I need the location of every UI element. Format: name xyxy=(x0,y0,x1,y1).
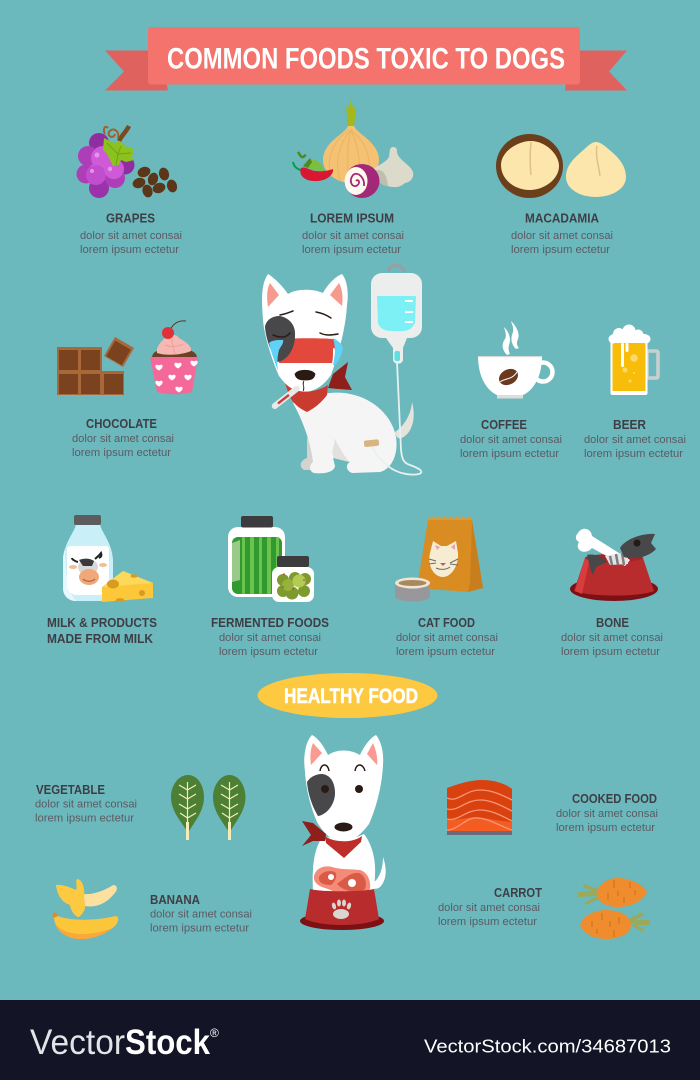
ears inner xyxy=(267,283,343,307)
text: banana description xyxy=(150,908,252,934)
text: bone description xyxy=(561,632,663,658)
text: banana description: lorem ipsum ectetur xyxy=(150,922,249,934)
closed eyes and brows xyxy=(273,311,338,337)
text: cat food description: dolor sit amet consai xyxy=(396,632,498,644)
panel: carrot xyxy=(438,878,650,939)
text: grapes description xyxy=(80,230,182,256)
bandana knot xyxy=(328,362,352,390)
tears xyxy=(269,338,343,371)
text: vegetable description: lorem ipsum ectetur xyxy=(35,812,134,824)
title banner xyxy=(105,27,627,90)
smiling brows xyxy=(320,765,365,771)
text: coffee description xyxy=(460,434,562,460)
panel: grapes xyxy=(76,126,182,256)
dog head xyxy=(262,274,348,392)
illustration: happy dog with steak bowl xyxy=(300,735,386,930)
ears inner xyxy=(310,743,377,765)
heading: milk and products: MADE FROM MILK xyxy=(47,631,154,646)
panel: beer xyxy=(584,324,686,460)
icon: spinach leaves xyxy=(171,775,246,840)
icon: chocolate and cupcake xyxy=(57,321,198,395)
text: beer description: lorem ipsum ectetur xyxy=(584,448,683,460)
text: fermented foods description: dolor sit amet consai xyxy=(219,632,321,644)
tail xyxy=(395,402,414,438)
panel: cooked food xyxy=(447,780,658,835)
eye patch xyxy=(307,774,335,816)
panel: banana xyxy=(52,879,252,939)
dog body xyxy=(313,834,375,895)
icon: bones in a red bowl xyxy=(570,529,658,601)
heading: bone: BONE xyxy=(596,615,629,630)
icon: salmon fillet xyxy=(447,780,512,835)
text: macadamia description: lorem ipsum ectetur xyxy=(511,244,610,256)
heading: coffee: COFFEE xyxy=(481,417,527,432)
icon: coffee cup xyxy=(478,321,552,398)
panel: macadamia xyxy=(496,134,626,256)
text: grapes description: lorem ipsum ectetur xyxy=(80,244,179,256)
heading: lorem ipsum: LOREM IPSUM xyxy=(310,210,394,226)
text: cat food description xyxy=(396,632,498,658)
text: vegetable description: dolor sit amet consai xyxy=(35,798,137,810)
heading: cat food: CAT FOOD xyxy=(418,615,475,630)
tail xyxy=(372,857,386,889)
paw print xyxy=(331,900,352,919)
nose and mouth xyxy=(295,370,315,391)
nose xyxy=(334,822,352,832)
text: lorem ipsum description: lorem ipsum ectetur xyxy=(302,244,401,256)
bandana xyxy=(285,383,328,412)
panel: fermented foods xyxy=(211,516,329,658)
text: macadamia description xyxy=(511,230,613,256)
text: cooked food description xyxy=(556,808,658,834)
section badge: healthy food xyxy=(258,673,438,718)
icon: bananas xyxy=(52,879,118,939)
text: banana description: dolor sit amet consai xyxy=(150,908,252,920)
heading: banana: BANANA xyxy=(150,892,200,907)
heading: chocolate: CHOCOLATE xyxy=(86,416,157,431)
panel: chocolate xyxy=(57,321,198,459)
bandage xyxy=(364,439,379,447)
icon: milk bottle and cheese xyxy=(63,515,153,602)
text: vegetable description xyxy=(35,798,137,824)
icon: onion chili garlic xyxy=(293,99,413,198)
text: bone description: lorem ipsum ectetur xyxy=(561,646,660,658)
bandana xyxy=(325,836,362,858)
text: carrot description xyxy=(438,902,540,928)
dog body xyxy=(293,393,397,473)
eyes xyxy=(321,785,363,793)
heading: milk and products xyxy=(47,615,157,646)
dog head xyxy=(304,735,383,842)
icon: macadamia nuts xyxy=(496,134,626,198)
heading: vegetable: VEGETABLE xyxy=(36,782,105,797)
dog rear legs shading xyxy=(301,437,325,470)
IV bag xyxy=(371,265,422,364)
panel: cat food xyxy=(395,516,498,658)
section badge: healthy food: HEALTHY FOOD xyxy=(284,684,418,708)
text: macadamia description: dolor sit amet consai xyxy=(511,230,613,242)
panel: bone xyxy=(561,529,663,658)
icon: beer mug xyxy=(608,324,658,395)
steak xyxy=(314,866,370,896)
eye patch xyxy=(265,316,295,362)
text: chocolate description: dolor sit amet consai xyxy=(72,433,174,445)
heading: macadamia: MACADAMIA xyxy=(525,210,599,226)
footer bar xyxy=(0,1000,700,1080)
IV tube xyxy=(372,362,421,475)
heading: carrot: CARROT xyxy=(494,885,542,900)
text: cooked food description: dolor sit amet consai xyxy=(556,808,658,820)
text: fermented foods description xyxy=(219,632,321,658)
heading: cooked food: COOKED FOOD xyxy=(572,791,657,806)
logo: VectorStock: ® xyxy=(210,1026,219,1040)
logo: VectorStock: Vector xyxy=(30,1023,125,1062)
text: fermented foods description: lorem ipsum ectetur xyxy=(219,646,318,658)
text: beer description: dolor sit amet consai xyxy=(584,434,686,446)
icon: grapes and seeds xyxy=(76,126,179,199)
image id: VectorStock.com/34687013 xyxy=(424,1036,671,1056)
text: chocolate description xyxy=(72,433,174,459)
text: coffee description: dolor sit amet consai xyxy=(460,434,562,446)
text: carrot description: dolor sit amet consai xyxy=(438,902,540,914)
logo: VectorStock: Stock xyxy=(125,1023,210,1062)
text: lorem ipsum description xyxy=(302,230,404,256)
logo: VectorStock xyxy=(30,1023,219,1062)
heading: fermented foods: FERMENTED FOODS xyxy=(211,615,329,630)
dog bowl xyxy=(300,912,384,930)
heading: beer: BEER xyxy=(613,417,646,432)
text: chocolate description: lorem ipsum ectetur xyxy=(72,447,171,459)
illustration: sick dog with IV drip xyxy=(262,265,422,475)
title: COMMON FOODS TOXIC TO DOGS xyxy=(167,42,565,76)
heading: milk and products: MILK & PRODUCTS xyxy=(47,615,157,630)
text: carrot description: lorem ipsum ectetur xyxy=(438,916,537,928)
text: beer description xyxy=(584,434,686,460)
icon: fermented jars xyxy=(228,516,314,602)
text: cooked food description: lorem ipsum ectetur xyxy=(556,822,655,834)
text: grapes description: dolor sit amet consai xyxy=(80,230,182,242)
text: coffee description: lorem ipsum ectetur xyxy=(460,448,559,460)
panel: lorem ipsum (onion, chili, garlic) xyxy=(293,99,413,256)
heading: grapes: GRAPES xyxy=(106,210,155,226)
panel: coffee xyxy=(460,321,562,460)
text: cat food description: lorem ipsum ectetur xyxy=(396,646,495,658)
icon: carrots xyxy=(578,878,650,939)
text: bone description: dolor sit amet consai xyxy=(561,632,663,644)
panel: milk and products xyxy=(47,515,157,646)
red fever band xyxy=(279,338,340,363)
thermometer xyxy=(271,385,301,410)
icon: cat food bag and bowl xyxy=(395,516,483,602)
panel: vegetable xyxy=(35,775,246,840)
text: lorem ipsum description: dolor sit amet consai xyxy=(302,230,404,242)
